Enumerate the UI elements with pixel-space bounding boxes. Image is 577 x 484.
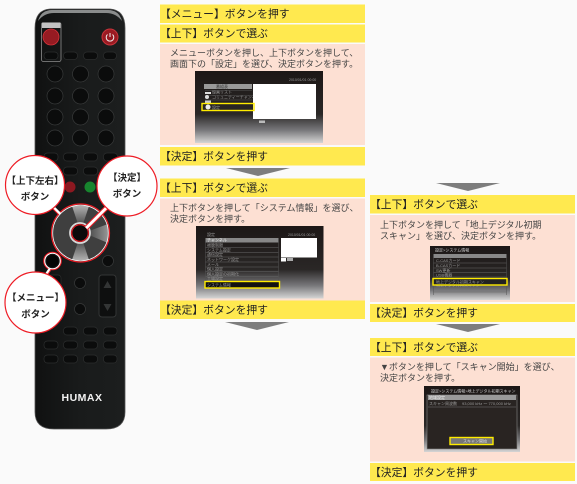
callout: confirm button: 【決定】 [108, 172, 146, 184]
instruction text: 上下ボタンを押して「システム情報」を選び、 [170, 202, 358, 213]
step 1 heading [160, 4, 365, 23]
selection highlight [450, 438, 493, 444]
red colour button [64, 182, 76, 192]
step 3 heading: 【決定】ボタンを押す [160, 149, 268, 163]
small round buttons [48, 256, 114, 314]
screenshot: system information menu: B-CASカード [436, 263, 460, 268]
step 6 heading: 【上下】ボタンで選ぶ [370, 198, 478, 211]
arrow [226, 168, 290, 176]
instruction text: 上下ボタンを押して「地上デジタル初期 [380, 219, 542, 230]
step 9 heading [370, 463, 575, 481]
step 5 heading [160, 300, 365, 319]
callout: menu button: 【メニュー】 [7, 293, 64, 304]
screenshot: system information menu: C-CASカード [436, 258, 460, 263]
panel: start scan selection [370, 358, 575, 462]
panel: terrestrial initial scan selection: スキャン」を選び、決定ボタンを押す。 [380, 230, 541, 241]
screenshot: settings menu: 設定 [207, 231, 215, 237]
red button [43, 29, 59, 45]
step 2 heading: 【上下】ボタンで選ぶ [160, 27, 268, 40]
menu button frame [42, 22, 61, 62]
screenshot: main menu: 設定 [212, 104, 220, 110]
callout: up down left right button: 【上下左右】 [6, 175, 64, 187]
step 5 heading: 【決定】ボタンを押す [160, 302, 268, 316]
step 3 heading [160, 147, 365, 166]
selection highlight [205, 282, 280, 288]
remote control [35, 9, 125, 429]
screenshot: settings menu: ネットワーク設定 [207, 256, 239, 262]
screenshot: settings menu: 視聴制限 [207, 242, 223, 248]
step 7 heading: 【決定】ボタンを押す [370, 306, 478, 320]
screenshot: scan start: スキャン周波数 [429, 400, 457, 406]
screenshot: main menu: 録画リスト [212, 88, 232, 94]
screenshot: settings menu: 個人設定 [207, 266, 223, 272]
step 2 heading [160, 24, 365, 42]
remote body [35, 9, 125, 429]
screenshot: system information menu: 地上デジタル初期スキャン [436, 278, 484, 284]
callout: menu button: ボタン [21, 308, 50, 320]
frame label plate [42, 23, 60, 28]
screenshot: main menu [195, 71, 323, 143]
panel: settings selection [160, 44, 365, 145]
screenshot: settings menu: システム設定 [207, 246, 231, 252]
screenshot: settings menu: チャンネル [207, 236, 227, 242]
middle button rows [44, 153, 118, 175]
arrow [436, 324, 500, 332]
screenshot: settings menu: 2010/01/01 00:00 [288, 233, 315, 237]
selection highlight [433, 278, 507, 285]
screenshot: main menu: 2010/01/01 00:00 [289, 78, 316, 82]
HUMAX logo: HUMAX [62, 392, 102, 404]
bottom button rows [44, 327, 117, 363]
step 1 heading: 【メニュー】ボタンを押す [160, 6, 290, 20]
arrow [225, 322, 289, 330]
selection highlight [202, 104, 254, 110]
instruction text: ▼ボタンを押して「スキャン開始」を選び、 [380, 361, 560, 372]
screenshot: settings menu: システム情報 [207, 282, 231, 288]
power button [102, 29, 118, 45]
callout: confirm button [97, 156, 157, 216]
menu button highlight [44, 252, 61, 270]
screenshot: settings menu: 通信設定 [207, 251, 223, 257]
panel: settings selection: 画面下の「設定」を選び、決定ボタンを押す。 [170, 58, 358, 69]
screenshot: settings menu: 個人設定の初期化 [207, 270, 239, 276]
screenshot: scan start: スキャン開始 [463, 438, 487, 444]
screenshot: scan start: 設定>システム情報>地上デジタル初期スキャン [431, 388, 515, 394]
panel: terrestrial initial scan selection [370, 215, 575, 302]
screenshot: main menu: 番組表 [216, 83, 228, 89]
top button rows [44, 52, 116, 60]
screenshot: settings menu: メール [207, 262, 219, 267]
callout: menu button [5, 272, 66, 333]
callout: up down left right button [6, 156, 64, 214]
screenshot: system information menu: 地上デジタル再スキャン [436, 282, 480, 288]
step 7 heading [370, 304, 575, 322]
screenshot: main menu: コミュニティーチャンネル [212, 94, 260, 100]
screenshot: scan start [424, 386, 520, 452]
direction pad disc [52, 204, 110, 262]
screenshot: system information menu [430, 246, 510, 300]
screenshot: system information menu: USB機器 [436, 272, 452, 278]
callout: up down left right button: ボタン [21, 191, 49, 203]
screenshot: settings menu: 工場設定 [207, 275, 223, 281]
screenshot: system information menu: 設定>システム情報 [435, 246, 469, 252]
screenshot: settings menu [196, 226, 324, 298]
screenshot: scan start: 93,000 kHz 〜 770,000 kHz [462, 401, 511, 406]
step 4 heading [160, 178, 365, 197]
remote top highlight [38, 10, 122, 21]
instruction text: メニューボタンを押し、上下ボタンを押して、 [170, 47, 358, 58]
step 8 heading [370, 338, 575, 356]
arrow [436, 183, 500, 191]
step 6 heading [370, 195, 575, 214]
panel: start scan selection: 決定ボタンを押す。 [380, 372, 460, 383]
callout: confirm button: ボタン [113, 188, 141, 200]
step 4 heading: 【上下】ボタンで選ぶ [160, 182, 268, 194]
panel: system information selection [160, 198, 365, 300]
screenshot: system information menu: SW更新 [436, 267, 450, 273]
connector lines [46, 204, 110, 275]
step 9 heading: 【決定】ボタンを押す [370, 465, 478, 479]
panel: system information selection: 決定ボタンを押す。 [170, 213, 250, 224]
green colour button [84, 182, 96, 192]
number buttons [47, 66, 114, 146]
step 8 heading: 【上下】ボタンで選ぶ [370, 341, 478, 354]
volume rocker [99, 275, 116, 317]
screenshot: scan start: 地域設定 [429, 394, 445, 400]
